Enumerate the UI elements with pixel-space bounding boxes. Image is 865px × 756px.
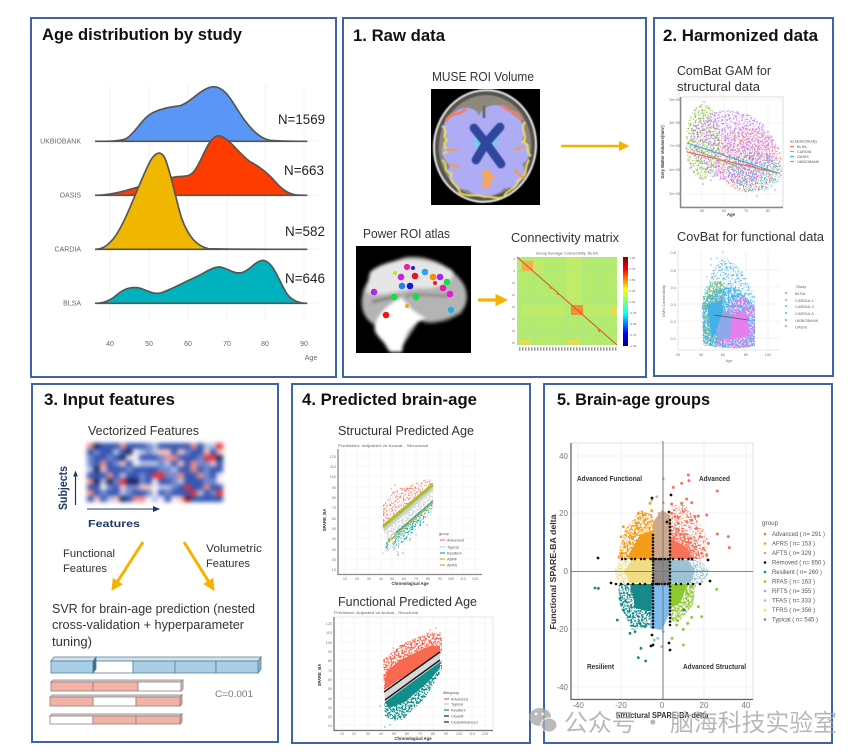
- scatter cluster: resilient: [598, 584, 653, 661]
- chart: functional predicted age scatter: 30: [328, 706, 332, 710]
- chart: structural predicted age scatter: 40: [379, 577, 383, 581]
- label: MUSE ROI Volume: MUSE ROI Volume: [432, 70, 534, 84]
- panel: harmonized data: [654, 18, 833, 376]
- legend: brain-age groups: AFTS ( n= 329 ): [772, 550, 815, 557]
- chart: structural predicted age scatter: 70: [332, 506, 336, 510]
- chart: structural predicted age scatter: 20: [332, 558, 336, 562]
- sample sizes: N=663: [284, 162, 324, 178]
- legend: ComBat: [790, 140, 820, 164]
- label: subjects axis: Subjects: [58, 466, 70, 510]
- chart: functional predicted age scatter: 50: [392, 732, 396, 736]
- chart: CovBat DMN connectivity scatter: 0.3: [670, 302, 677, 307]
- chart: structural predicted age scatter: 50: [332, 527, 336, 531]
- legend: CovBat: BLSA: [795, 291, 806, 296]
- colour bar: -0.50: [630, 322, 637, 326]
- chart: functional predicted age scatter: 90: [444, 732, 448, 736]
- image: Power ROI atlas brain: [356, 246, 471, 353]
- colour bar: -0.25: [630, 311, 637, 315]
- sample sizes: N=646: [285, 270, 325, 286]
- chart: functional predicted age scatter: 10: [340, 732, 344, 736]
- axis ticks: 40: [559, 452, 569, 461]
- label: connectivity matrix: Connectivity matrix: [511, 231, 620, 245]
- chart: functional predicted age scatter: 10: [328, 724, 332, 728]
- chart: structural predicted age scatter: 100: [330, 475, 336, 479]
- chart: CovBat DMN connectivity scatter: 20: [676, 352, 681, 357]
- chart: structural predicted age scatter: 110: [330, 465, 336, 469]
- chart: structural predicted age scatter: 30: [332, 548, 336, 552]
- chart: structural predicted age scatter: 80: [426, 577, 430, 581]
- legend: brain-age groups: RFTS ( n= 355 ): [772, 588, 815, 595]
- axis titles: Functional SPARE-BA delta: [549, 514, 558, 630]
- legend: brain-age groups: Removed ( n= 650 ): [772, 560, 825, 566]
- chart: CovBat DMN connectivity scatter: 0.5: [670, 268, 677, 273]
- chart: functional predicted age scatter: 110: [326, 631, 332, 635]
- legend: brain-age groups: TFRS ( n= 356 ): [772, 607, 815, 614]
- chart: functional predicted age scatter: 50: [328, 687, 332, 691]
- colour bar: -0.75: [630, 333, 637, 337]
- legend: brain-age groups: RFAS ( n= 163 ): [772, 578, 815, 586]
- axis ticks: 0: [564, 567, 569, 576]
- legend: brain-age groups: group: [762, 520, 779, 527]
- heading: input features: 3. Input features: [44, 390, 175, 409]
- scatter cluster: TFAS: [670, 560, 710, 584]
- arrow: MRI to harmonized data: [561, 145, 625, 147]
- sample sizes: N=582: [285, 223, 325, 239]
- panel: age distribution by study: [31, 18, 336, 377]
- legend: brain-age groups: Resilient ( n= 260 ): [772, 569, 822, 576]
- sample sizes: N=1569: [278, 111, 325, 127]
- chart: structural predicted age scatter: 80: [332, 496, 336, 500]
- text: SVR description: SVR for brain-age prediction (nested: [52, 602, 255, 616]
- chart: structural predicted age scatter: 60: [402, 577, 406, 581]
- ridge: BLSA: [95, 260, 307, 303]
- chart: functional predicted age scatter: 40: [328, 697, 332, 701]
- colour bar: 0.75: [630, 267, 636, 271]
- age axis: 60: [184, 341, 192, 348]
- quadrant labels: Advanced: [699, 476, 730, 483]
- legend: structural groups: Resilient: [447, 552, 463, 556]
- chart: functional predicted age scatter: 120: [482, 732, 488, 736]
- chart: structural predicted age scatter: 10: [343, 577, 347, 581]
- watermark text: 公众号 · 脑海科技实验室: [564, 703, 837, 738]
- chart: connectivity matrix heatmap: 48: [512, 329, 515, 333]
- chart: structural predicted age scatter: 50: [390, 577, 394, 581]
- chart: connectivity matrix heatmap: [512, 250, 617, 349]
- ridgeline chart: [40, 85, 318, 362]
- chart: connectivity matrix heatmap: 16: [512, 281, 515, 285]
- image: axial MRI with ROI overlay: [431, 89, 540, 205]
- chart: functional predicted age scatter: 80: [328, 659, 332, 663]
- chart: functional predicted age scatter: 90: [328, 650, 332, 654]
- age axis: 40: [106, 341, 114, 348]
- label: functional features: Functional: [63, 548, 115, 560]
- label: volumetric features: Features: [206, 558, 250, 570]
- chart: functional predicted age scatter: 100: [456, 732, 462, 736]
- label: functional predicted age: Functional Predicted Age: [338, 595, 477, 609]
- ROI markers: [371, 264, 454, 318]
- label: structural predicted age: Structural Predicted Age: [338, 424, 474, 438]
- chart: ComBat grey matter scatter: Grey Matter Volumes(mm³): [660, 125, 665, 179]
- heading: predicted brain-age: 4. Predicted brain-age: [302, 390, 477, 409]
- chart: CovBat DMN connectivity scatter: 0.2: [670, 319, 677, 324]
- axis ticks: -40: [556, 683, 569, 692]
- chart: structural predicted age scatter: 10: [332, 568, 336, 572]
- chart: CovBat DMN connectivity scatter: 80: [744, 352, 749, 357]
- chart: functional predicted age scatter: 20: [328, 715, 332, 719]
- legend: ComBat: UKBIOBANK: [797, 160, 820, 164]
- scatter cluster: removed boundary: [598, 495, 710, 650]
- chart: functional predicted age scatter: Predicted- Adjusted vs Actual - Structural: [334, 610, 418, 615]
- chart: ComBat grey matter scatter: 70: [744, 209, 748, 213]
- legend: structural groups: [439, 532, 464, 568]
- age axis: Age: [305, 355, 317, 362]
- quadrant labels: Resilient: [587, 664, 615, 671]
- chart: functional predicted age scatter: 40: [379, 732, 383, 736]
- legend: structural groups: Typical: [447, 546, 459, 550]
- chart: functional predicted age scatter: SPARE_BA: [317, 664, 322, 686]
- axis ticks: 20: [700, 701, 709, 710]
- chart: CovBat DMN connectivity scatter: Age: [725, 358, 733, 363]
- legend: CovBat: CARDIA-1: [795, 298, 814, 303]
- chart: ComBat grey matter scatter: 6e+05: [669, 168, 680, 172]
- chart: structural predicted age scatter: Chronological Age: [391, 581, 429, 586]
- chart: ComBat grey matter scatter: 9e+05: [669, 98, 680, 102]
- chart: functional predicted age scatter: 100: [326, 641, 332, 645]
- legend: functional groups: [443, 691, 478, 724]
- chart: functional predicted age scatter: 120: [326, 622, 332, 626]
- label: C value: C=0.001: [215, 689, 253, 699]
- legend: structural groups: Advanced: [447, 538, 464, 542]
- chart: functional predicted age scatter: 110: [469, 732, 475, 736]
- axis ticks: 0: [660, 701, 665, 710]
- chart: CovBat DMN connectivity scatter: 0.4: [670, 285, 677, 290]
- label: subjects axis: [58, 466, 76, 510]
- legend: structural groups: ASRF: [447, 558, 458, 562]
- text: SVR description: cross-validation + hyperparameter: [52, 618, 244, 632]
- heading: raw data: 1. Raw data: [353, 26, 446, 45]
- legend: brain-age groups: [762, 520, 825, 624]
- age axis: [106, 341, 317, 362]
- heading: harmonized data: 2. Harmonized data: [663, 26, 819, 45]
- chart: brain-age quadrant scatter: Structural SPARE-BA delta: [616, 711, 709, 720]
- heading: brain-age groups: 5. Brain-age groups: [557, 390, 710, 409]
- chart: CovBat DMN connectivity scatter: 100: [765, 352, 772, 357]
- age axis: 90: [300, 341, 308, 348]
- legend: brain-age groups: Typical ( n= 545 ): [772, 616, 818, 624]
- quadrant labels: Advanced Functional: [577, 476, 642, 483]
- legend: brain-age groups: AFRS ( n= 153 ): [772, 540, 815, 548]
- label: vectorized features: Vectorized Features: [88, 424, 199, 438]
- legend: ComBat: as.factor(Study): [790, 140, 818, 144]
- chart: functional predicted age scatter: 70: [418, 732, 422, 736]
- arrow: to volumetric features: [184, 542, 212, 587]
- study labels: UKBIOBANK: [40, 138, 81, 146]
- chart: structural predicted age scatter: 60: [332, 517, 336, 521]
- legend: functional groups: dbfrgroup: [443, 691, 459, 695]
- legend: brain-age groups: Advanced ( n= 291 ): [772, 531, 825, 538]
- panel: input features: [32, 384, 278, 742]
- chart: CovBat DMN connectivity scatter: 0.6: [670, 250, 677, 255]
- label: ComBat GAM: ComBat GAM for: [677, 64, 771, 78]
- legend: CovBat: OASIS: [795, 324, 808, 330]
- legend: functional groups: Advanced: [451, 698, 468, 702]
- study labels: [40, 138, 81, 308]
- chart: structural predicted age scatter: 90: [332, 486, 336, 490]
- text: SVR description: tuning): [52, 635, 92, 649]
- chart: functional predicted age scatter: 60: [328, 678, 332, 682]
- ridge: UKBIOBANK: [95, 87, 307, 141]
- chart: connectivity matrix heatmap: 24: [512, 293, 515, 297]
- chart: CovBat DMN connectivity scatter: 60: [721, 352, 726, 357]
- diagram: inner folds: [50, 680, 183, 724]
- chart: functional predicted age scatter: 60: [405, 732, 409, 736]
- legend: ComBat: BLSA: [797, 145, 807, 149]
- heatmap: vectorized features: [84, 440, 227, 506]
- axis ticks: -20: [556, 625, 569, 634]
- legend: structural groups: group: [439, 532, 449, 536]
- chart: CovBat DMN connectivity scatter: 40: [699, 352, 704, 357]
- axis ticks: 20: [559, 509, 569, 518]
- label: ComBat GAM: structural data: [677, 80, 760, 94]
- chart: structural predicted age scatter: 120: [472, 577, 478, 581]
- heading: age distribution: Age distribution by study: [42, 25, 243, 44]
- legend: functional groups: Resilient: [451, 708, 467, 712]
- chart: ComBat grey matter scatter: Age: [727, 212, 736, 217]
- chart: ComBat grey matter scatter: 5e+05: [669, 192, 680, 196]
- chart: ComBat grey matter scatter: 7e+05: [669, 144, 680, 148]
- chart: structural predicted age scatter: 70: [414, 577, 418, 581]
- chart: functional predicted age scatter: [317, 610, 493, 741]
- chart: structural predicted age scatter: 20: [355, 577, 359, 581]
- chart: ComBat grey matter scatter: 80: [766, 209, 770, 213]
- chart: CovBat DMN connectivity scatter: [661, 250, 780, 363]
- legend: structural groups: AFRS: [447, 564, 458, 568]
- chart: functional predicted age scatter: 70: [328, 669, 332, 673]
- chart: structural predicted age scatter: SPARE_BA: [322, 509, 327, 531]
- chart: functional predicted age scatter: 30: [366, 732, 370, 736]
- chart: functional predicted age scatter: Chronological Age: [394, 736, 432, 741]
- chart: CovBat DMN connectivity scatter: DMN Connectivity: [661, 285, 666, 317]
- colour bar: 0.25: [630, 289, 636, 293]
- chart: ComBat grey matter scatter: 8e+05: [669, 121, 680, 125]
- scatter cluster: RFAS: [670, 584, 717, 645]
- chart: structural predicted age scatter: 110: [460, 577, 466, 581]
- label: functional features: Features: [63, 563, 107, 575]
- chart: functional predicted age scatter: 20: [352, 732, 356, 736]
- chart: structural predicted age scatter: 30: [367, 577, 371, 581]
- arrow: atlas to matrix: [478, 298, 503, 302]
- chart: connectivity matrix heatmap: 32: [512, 305, 515, 309]
- chart: functional predicted age scatter: 80: [431, 732, 435, 736]
- chart: structural predicted age scatter: Predicted- Adjusted vs Actual - Structural: [338, 443, 428, 448]
- label: CovBat: CovBat for functional data: [677, 230, 824, 244]
- chart: brain-age quadrant scatter: [549, 441, 753, 720]
- axis ticks: -20: [615, 701, 627, 710]
- age axis: 50: [145, 341, 153, 348]
- panel: brain-age groups: [544, 384, 832, 743]
- legend: CovBat: CARDIA-4: [795, 311, 814, 316]
- label: Power ROI atlas: Power ROI atlas: [363, 227, 450, 241]
- chart: connectivity matrix heatmap: 8: [513, 269, 515, 273]
- chart: CovBat DMN connectivity scatter: 0.1: [670, 336, 677, 341]
- axis ticks: 40: [742, 701, 751, 710]
- legend: ComBat: CARDIA: [797, 150, 812, 154]
- chart: structural predicted age scatter: 120: [330, 455, 336, 459]
- scatter cluster: typical: [653, 559, 670, 584]
- arrow: to functional features: [114, 542, 143, 587]
- label: features axis: Features: [88, 518, 140, 530]
- ridge: CARDIA: [95, 153, 307, 249]
- scatter cluster: advanced: [670, 475, 729, 559]
- study labels: OASIS: [60, 192, 81, 200]
- legend: CovBat: [786, 284, 819, 330]
- watermark: [529, 703, 837, 738]
- label: features axis: [87, 506, 160, 530]
- study labels: BLSA: [63, 300, 81, 308]
- scatter cluster: RFTS: [650, 584, 670, 647]
- label: volumetric features: Volumetric: [206, 543, 263, 555]
- chart: connectivity matrix heatmap: 40: [512, 317, 515, 321]
- panel: predicted brain-age: [292, 384, 530, 743]
- legend: CovBat: CARDIA-3: [795, 304, 814, 309]
- legend: ComBat: OASIS: [797, 155, 809, 159]
- chart: connectivity matrix heatmap: 56: [512, 341, 515, 345]
- chart: structural predicted age scatter: 90: [438, 577, 442, 581]
- chart: ComBat grey matter scatter: 50: [700, 209, 704, 213]
- age axis: 80: [261, 341, 269, 348]
- legend: CovBat: Study: [796, 284, 806, 289]
- quadrant labels: Advanced Structural: [683, 664, 746, 671]
- legend: brain-age groups: TFAS ( n= 333 ): [772, 598, 815, 604]
- diagram: outer cross-validation folds: [51, 657, 261, 673]
- colour bar: 0.00: [630, 300, 636, 304]
- sample sizes: [278, 111, 325, 286]
- ridge: OASIS: [95, 136, 307, 195]
- chart: connectivity matrix heatmap: Group Average Connectivity: BLSA: [536, 250, 598, 256]
- scatter cluster: AFTS: [652, 479, 670, 559]
- chart: structural predicted age scatter: [322, 443, 482, 586]
- chart: ComBat grey matter scatter: [660, 97, 792, 217]
- legend: functional groups: CloseAdvanced: [451, 720, 478, 724]
- icon: chat bubbles: [529, 708, 557, 732]
- colour bar: [623, 256, 637, 348]
- legend: CovBat: UKBIOBANK: [795, 318, 819, 323]
- colour bar: 1.00: [630, 256, 636, 260]
- axis ticks: -40: [572, 701, 584, 710]
- chart: ComBat grey matter scatter: 60: [722, 209, 726, 213]
- legend: functional groups: Typical: [451, 702, 463, 706]
- chart: connectivity matrix heatmap: 0: [513, 257, 515, 261]
- colour bar: 0.50: [630, 278, 636, 282]
- chart: structural predicted age scatter: 40: [332, 537, 336, 541]
- scatter cluster: AFRS: [617, 503, 653, 559]
- quadrant labels: [577, 476, 746, 671]
- legend: functional groups: CloseR: [451, 714, 464, 718]
- study labels: CARDIA: [55, 246, 81, 254]
- panel: raw data: [343, 18, 646, 377]
- colour bar: -1.00: [630, 344, 637, 348]
- chart: structural predicted age scatter: 100: [448, 577, 454, 581]
- age axis: 70: [223, 341, 231, 348]
- scatter cluster: TFRS: [614, 559, 653, 584]
- axis ticks: [556, 452, 751, 710]
